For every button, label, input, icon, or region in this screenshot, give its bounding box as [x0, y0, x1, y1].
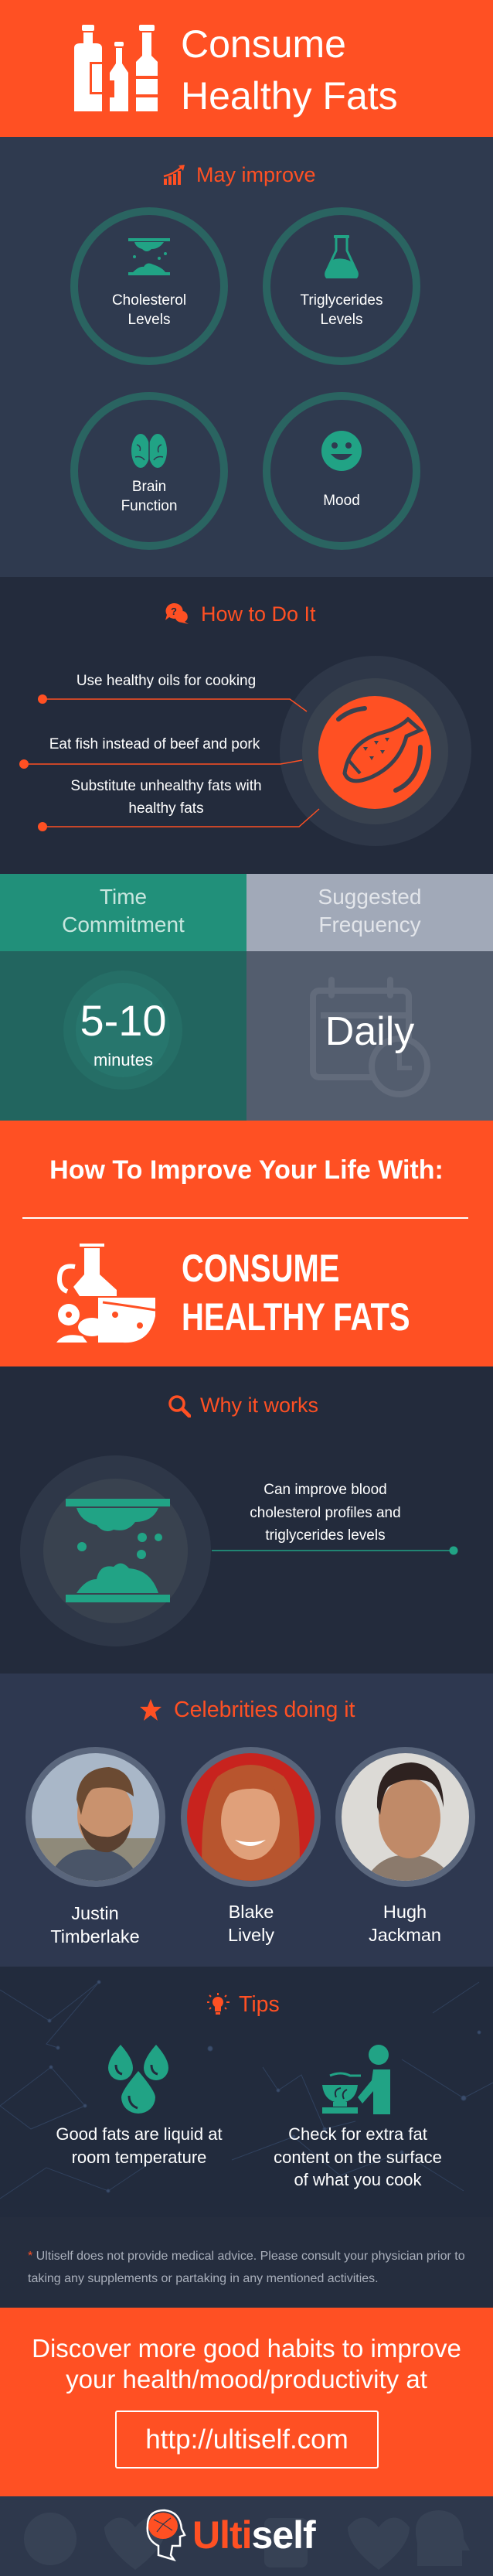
title: consume healthy fats	[182, 1247, 410, 1339]
panel: celebrities	[26, 1699, 475, 1945]
button: url	[115, 2411, 379, 2469]
photo: justin timberlake	[26, 1747, 165, 1887]
panel: may improve	[0, 137, 493, 577]
body: daily	[246, 951, 493, 1121]
body: daily: Daily	[325, 1009, 414, 1054]
item: triglycerides levels	[263, 207, 420, 365]
tip: good fats are liquid: Good fats are liquid at	[56, 2124, 223, 2144]
disclaimer	[0, 2217, 493, 2308]
text: discover more: your health/mood/productivity at	[66, 2365, 427, 2393]
tip: good fats are liquid: room temperature	[72, 2147, 206, 2167]
heading: how to do it: ?	[171, 606, 177, 617]
text: can improve blood cholesterol	[250, 1482, 401, 1544]
icon: water drops	[108, 2045, 168, 2114]
icon: fish	[336, 706, 423, 793]
title	[181, 22, 398, 118]
item: substitute fats: healthy fats	[128, 800, 204, 817]
panel: why it works	[0, 1366, 493, 1674]
header banner	[0, 0, 493, 137]
item: cholesterol levels: Levels	[128, 312, 170, 328]
heading: tips: Tips	[239, 1992, 280, 2017]
icon: smiley	[321, 431, 362, 471]
panel: tips	[0, 1967, 493, 2217]
item: eat fish: Eat fish instead of beef and pork	[49, 736, 260, 752]
header: suggested frequency: Frequency	[318, 913, 421, 937]
name: justin timberlake: Justin	[71, 1903, 119, 1923]
heading: how to improve your life with: How To Improve Your Life With:	[49, 1155, 444, 1185]
text: discover more: Discover more good habits to improve	[32, 2334, 461, 2363]
heading: tips	[207, 1992, 280, 2017]
photo: hugh jackman	[335, 1747, 475, 1887]
logo: ultiself	[147, 2509, 316, 2561]
icon: oil jug and food	[56, 1244, 155, 1343]
icon: calendar clock	[310, 977, 430, 1097]
name: blake lively: Lively	[228, 1925, 274, 1945]
tip: good fats are liquid	[56, 2124, 223, 2167]
button: url: http://ultiself.com	[145, 2424, 348, 2455]
item: brain function	[70, 392, 228, 550]
item: mood: Mood	[323, 493, 360, 509]
heading: how to do it: How to Do It	[201, 602, 316, 626]
title: Healthy Fats	[181, 74, 398, 118]
title: consume healthy fats: CONSUME	[182, 1247, 339, 1290]
header: suggested frequency	[246, 874, 493, 951]
illustration: fish circle	[280, 656, 471, 846]
icon: person cooking	[322, 2045, 390, 2114]
tip: check for extra fat: of what you cook	[294, 2170, 422, 2189]
tip: check for extra fat: content on the surface	[274, 2147, 442, 2167]
heading: may improve: May improve	[196, 163, 316, 186]
footer: logo	[0, 2496, 493, 2576]
text: can improve blood cholesterol: Can improve blood	[264, 1482, 387, 1498]
panel: how to improve banner	[0, 1121, 493, 1366]
item: triglycerides levels: Triglycerides	[300, 292, 383, 309]
icon: bottles	[74, 25, 158, 111]
illustration: hourglass circle	[20, 1455, 211, 1646]
name: hugh jackman: Jackman	[369, 1925, 441, 1945]
tip: check for extra fat	[274, 2124, 442, 2189]
item: eat fish	[19, 736, 303, 769]
text: can improve blood cholesterol: cholesterol profiles and	[250, 1505, 401, 1520]
item: substitute fats: Substitute unhealthy fats with	[70, 778, 262, 794]
body: 5-10 minutes	[0, 951, 246, 1121]
header: suggested frequency: Suggested	[318, 885, 421, 909]
body: 5-10 minutes: minutes	[94, 1050, 153, 1070]
name: justin timberlake	[50, 1903, 140, 1947]
header: time commitment: Commitment	[62, 913, 185, 937]
panel: call to action	[0, 2308, 493, 2496]
name: hugh jackman	[369, 1902, 441, 1945]
icon: brain	[131, 434, 167, 468]
title: consume healthy fats: HEALTHY FATS	[182, 1295, 410, 1339]
name: blake lively	[228, 1902, 274, 1945]
text: discover more	[32, 2334, 461, 2393]
item: healthy oils	[38, 673, 308, 712]
disclaimer: * Ultiself does not provide medical advice. Please consult your physician prior to taking any supplements or partaking in any mentioned activities.	[28, 2250, 465, 2285]
panel: how to do it	[0, 577, 493, 874]
icon: hourglass	[128, 238, 170, 275]
tip: check for extra fat: Check for extra fat	[288, 2124, 427, 2144]
text: can improve blood cholesterol: triglycerides levels	[265, 1527, 386, 1544]
panel: time commitment	[0, 874, 246, 1121]
item: brain function: Function	[121, 498, 177, 514]
name: hugh jackman: Hugh	[383, 1902, 427, 1922]
header: time commitment	[0, 874, 246, 951]
item: substitute fats	[38, 778, 320, 831]
item: brain function: Brain	[132, 479, 166, 495]
name: justin timberlake: Timberlake	[50, 1926, 140, 1947]
item: cholesterol levels: Cholesterol	[112, 292, 186, 309]
item: triglycerides levels: Levels	[321, 312, 362, 328]
item: healthy oils: Use healthy oils for cooking	[76, 673, 256, 689]
logo: ultiself: Ultiself	[192, 2513, 315, 2557]
title: Consume	[181, 22, 346, 66]
name: blake lively: Blake	[229, 1902, 274, 1922]
photo: blake lively	[181, 1747, 321, 1887]
item: cholesterol levels	[70, 207, 228, 365]
body: 5-10 minutes: 5-10	[80, 996, 167, 1045]
icon: flask	[325, 235, 359, 278]
heading: celebrities doing it: Celebrities doing it	[174, 1697, 355, 1722]
panel: suggested frequency	[246, 874, 493, 1121]
item: mood	[263, 392, 420, 550]
heading: why it works: Why it works	[200, 1394, 318, 1417]
header: time commitment: Time	[100, 885, 147, 909]
